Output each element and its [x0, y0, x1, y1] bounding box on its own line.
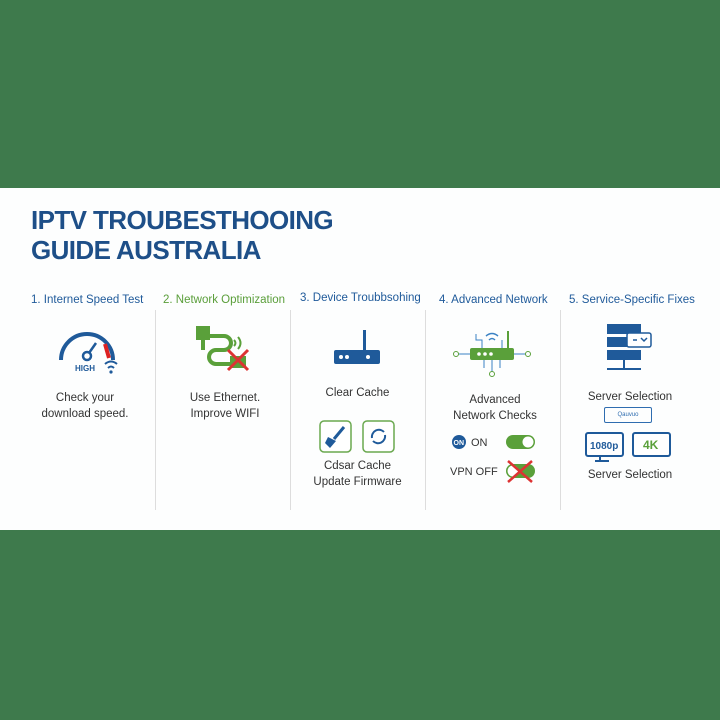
text 1: download speed. — [42, 408, 128, 420]
text 4: Network Checks — [453, 410, 537, 422]
text 3: Clear Cache — [326, 387, 389, 399]
text 2: Improve WIFI — [190, 408, 260, 420]
white content band — [0, 188, 720, 530]
heading 3: 3. Device Troubbsohing — [300, 292, 421, 304]
dropdown box: Qauvuo — [617, 412, 638, 418]
text 4 — [453, 394, 537, 422]
text 1 — [42, 392, 128, 420]
text 3b: Cdsar Cache — [324, 460, 391, 472]
toggles — [450, 435, 535, 483]
text 5: Server Selection — [588, 391, 672, 403]
text 3b — [313, 460, 402, 488]
heading 4: 4. Advanced Network — [439, 294, 548, 306]
icon: ethernet — [196, 326, 249, 371]
text 2 — [190, 392, 260, 420]
title: IPTV TROUBESTHOOING — [31, 205, 333, 235]
icon: network router — [453, 331, 531, 377]
icon: monitors: 4K — [643, 438, 659, 452]
text 2: Use Ethernet. — [190, 392, 260, 404]
icon: router — [334, 330, 380, 364]
icon: monitors: 1080p — [590, 441, 618, 452]
icon: speedometer: HIGH — [75, 364, 95, 373]
text 1: Check your — [56, 392, 114, 404]
toggles: ON — [454, 440, 464, 447]
text 3b: Update Firmware — [313, 476, 402, 488]
title: GUIDE AUSTRALIA — [31, 235, 261, 265]
heading 1: 1. Internet Speed Test — [31, 294, 143, 306]
icon: speedometer — [59, 332, 118, 374]
text 5b: Server Selection — [588, 469, 672, 481]
title — [31, 205, 333, 265]
heading 2: 2. Network Optimization — [163, 294, 285, 306]
heading 5: 5. Service-Specific Fixes — [569, 294, 695, 306]
toggles: VPN OFF — [450, 466, 498, 478]
text 4: Advanced — [469, 394, 521, 406]
icon: monitors — [585, 432, 671, 462]
icon: server — [607, 324, 652, 370]
toggles: ON — [471, 437, 488, 449]
icon: broom & refresh — [319, 420, 395, 453]
dropdown box — [604, 407, 652, 423]
